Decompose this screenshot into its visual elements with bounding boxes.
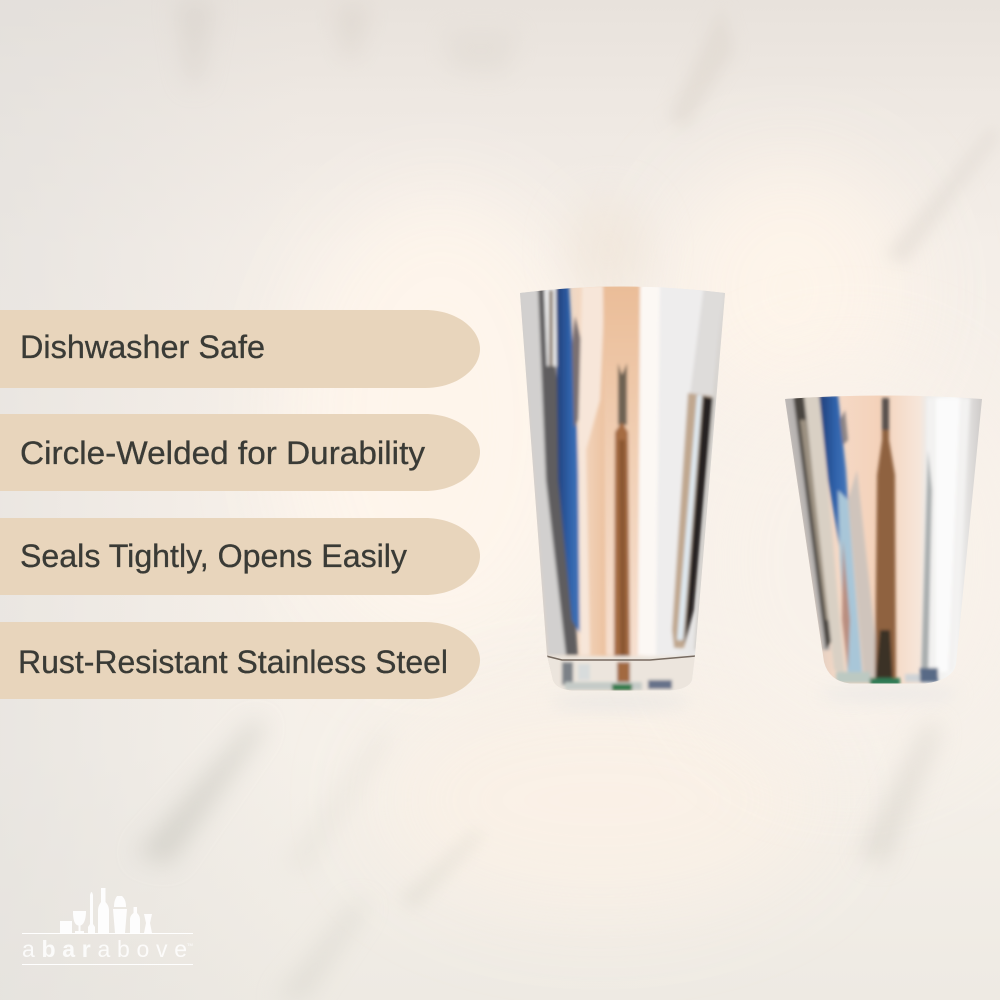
- feature pill: Circle-Welded: [0, 414, 480, 491]
- feature pill: Rust-Resistant: [0, 622, 480, 699]
- icon: bar glassware silhouettes: [60, 888, 152, 933]
- small shaker tin: [780, 390, 985, 685]
- feature pill: Seals Tightly: [0, 518, 480, 595]
- logo: A Bar Above: [22, 888, 193, 965]
- large shaker tin: [515, 280, 730, 695]
- feature pill: Dishwasher Safe: [0, 310, 480, 388]
- logo wordmark: a bar above: [22, 936, 187, 962]
- shelf line: [22, 933, 193, 934]
- label: Rust-Resistant Stainless Steel: Rust-Resistant Stainless Steel: [18, 644, 448, 680]
- lid band groove: [546, 656, 696, 660]
- marble veins: [175, 0, 215, 85]
- label: Dishwasher Safe: Dishwasher Safe: [20, 329, 265, 365]
- trademark: TM: [187, 942, 193, 947]
- label: Seals Tightly, Opens Easily: Seals Tightly, Opens Easily: [20, 538, 407, 574]
- label: Circle-Welded for Durability: Circle-Welded for Durability: [20, 435, 425, 471]
